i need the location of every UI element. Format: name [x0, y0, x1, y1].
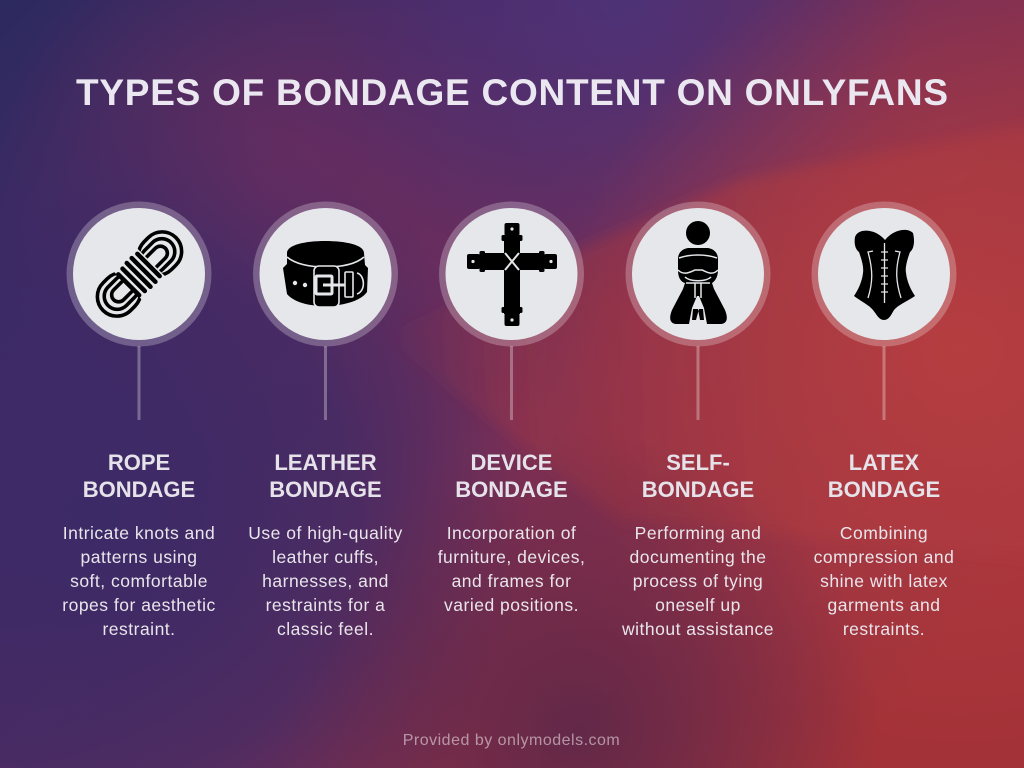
- column: leather bondage: [248, 202, 403, 639]
- column: latex bondage: [812, 202, 956, 639]
- disc: latex: [818, 208, 950, 340]
- heading: device bondage: BONDAGE: [455, 477, 568, 502]
- description: self-bondage: without assistance: [621, 619, 774, 639]
- description: latex bondage: shine with latex: [820, 571, 948, 591]
- description: rope bondage: ropes for aesthetic: [62, 595, 216, 615]
- icon: restraint cross: [467, 223, 557, 326]
- badge: self: [626, 202, 770, 346]
- heading: rope bondage: BONDAGE: [83, 477, 195, 502]
- footer credit: Provided by onlymodels.com: [403, 732, 620, 749]
- description: leather bondage: Use of high-quality: [248, 523, 403, 543]
- heading: leather bondage: LEATHER: [274, 450, 377, 475]
- stem: leather: [324, 346, 327, 420]
- icon: corset: [854, 230, 915, 320]
- description: self-bondage: process of tying: [633, 571, 763, 591]
- disc: leather: [260, 208, 392, 340]
- heading: latex bondage: BONDAGE: [828, 477, 940, 502]
- description: latex bondage: compression and: [814, 547, 954, 567]
- heading: rope bondage: ROPE: [108, 450, 170, 475]
- description: self-bondage: documenting the: [630, 547, 766, 567]
- heading: self-bondage: BONDAGE: [642, 477, 754, 502]
- disc: rope: [73, 208, 205, 340]
- badge: device: [439, 202, 584, 346]
- heading: leather bondage: BONDAGE: [269, 477, 382, 502]
- icon: leather collar with buckle: [283, 241, 368, 307]
- column: self-bondage: [621, 202, 774, 639]
- stem: self: [696, 346, 700, 420]
- stem: latex: [882, 346, 886, 420]
- heading: latex bondage: LATEX: [849, 450, 920, 475]
- description: device bondage: furniture, devices,: [438, 547, 585, 567]
- column: device bondage: [438, 202, 585, 615]
- badge: latex: [812, 202, 956, 346]
- description: device bondage: varied positions.: [444, 595, 579, 615]
- badge: leather: [253, 202, 398, 346]
- icon: kneeling tied figure: [670, 221, 727, 324]
- description: device bondage: and frames for: [452, 571, 571, 591]
- description: latex bondage: garments and: [827, 595, 941, 615]
- description: latex bondage: Combining: [840, 523, 928, 543]
- description: leather bondage: harnesses, and: [262, 571, 389, 591]
- description: self-bondage: Performing and: [635, 523, 761, 543]
- description: leather bondage: restraints for a: [266, 595, 385, 615]
- description: rope bondage: soft, comfortable: [70, 571, 208, 591]
- stem: device: [510, 346, 513, 420]
- badge: rope: [66, 202, 212, 346]
- description: leather bondage: leather cuffs,: [272, 547, 379, 567]
- title: TYPES OF BONDAGE CONTENT ON ONLYFANS: [76, 72, 948, 113]
- heading: device bondage: DEVICE: [471, 450, 552, 475]
- disc: device: [446, 208, 578, 340]
- icon: coiled rope: [89, 223, 190, 325]
- disc: self: [632, 208, 764, 340]
- description: rope bondage: Intricate knots and: [63, 523, 215, 543]
- description: leather bondage: classic feel.: [277, 619, 374, 639]
- stem: rope: [138, 346, 140, 420]
- description: self-bondage: oneself up: [655, 595, 741, 615]
- heading: self-bondage: SELF-: [666, 450, 730, 475]
- description: rope bondage: restraint.: [102, 619, 176, 639]
- column: rope bondage: [62, 202, 216, 639]
- description: latex bondage: restraints.: [843, 619, 925, 639]
- description: rope bondage: patterns using: [81, 547, 197, 567]
- description: device bondage: Incorporation of: [447, 523, 576, 543]
